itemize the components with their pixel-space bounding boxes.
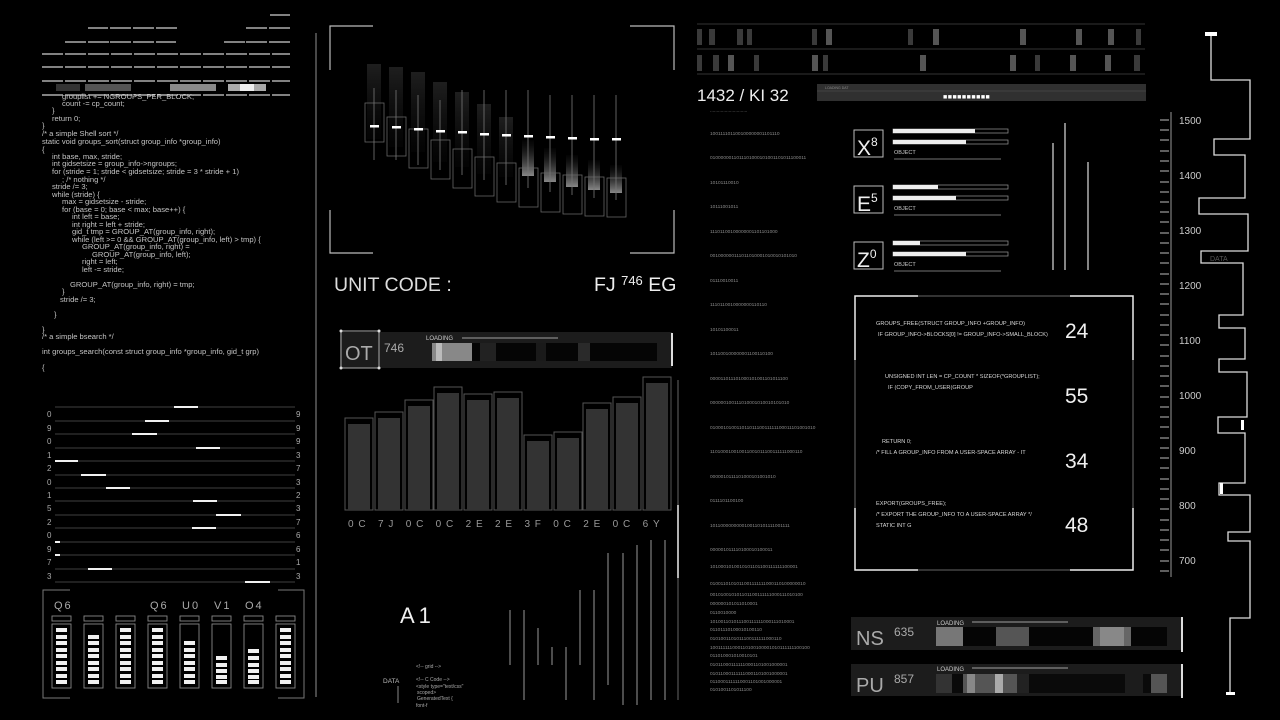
chart: number track lines: 7 (296, 464, 301, 473)
chart: ruler scale: 800 (1179, 501, 1196, 512)
panel: XEZ indicators: OBJECT (894, 206, 916, 212)
text block: C source code: stride /= 3; (52, 182, 88, 191)
text block: binary column: 01000101001101101110011111100011101001010 (710, 425, 816, 431)
chart: number track lines: 3 (296, 504, 301, 513)
chart: number track lines: 3 (47, 572, 52, 581)
chart: number track lines: 6 (296, 531, 301, 540)
chart: number track lines: 9 (296, 437, 301, 446)
chart: number track lines (47, 407, 301, 582)
text block: binary column: 0111101100100 (710, 498, 744, 504)
text block: C source code: stride /= 3; (60, 295, 96, 304)
text block: C source code: int base, max, stride; (52, 152, 122, 161)
divider line center (677, 380, 679, 700)
panel: code values: RETURN 0; (882, 439, 912, 445)
panel: XEZ indicators: Z (857, 249, 870, 272)
panel: OT loading bar (340, 330, 673, 370)
chart: number track lines: 9 (296, 424, 301, 433)
panel: code values: /* FILL A GROUP_INFO FROM A USER-SPACE ARRAY - IT (876, 450, 1026, 456)
panel: code values: IF GROUP_INFO->BLOCKS[0] != GROUP_INFO->SMALL_BLOCK) (878, 332, 1048, 338)
text block: C source code: /* a simple Shell sort */ (42, 129, 119, 138)
text block: C source code: while (stride) { (51, 190, 100, 199)
text block: binary column: 0110010000 (710, 610, 737, 616)
text block: binary column: 0110001111110001101001000001 (710, 679, 783, 685)
panel: code values (855, 296, 1133, 570)
panel: NS loading (851, 617, 1183, 652)
text block: C source code: count -= cp_count; (62, 99, 125, 108)
text block: C source code: int gidsetsize = group_info->ngroups; (52, 159, 177, 168)
text block: binary column: 1011000000000100110101111001111 (710, 523, 790, 529)
text: FJ 746 EG: EG (643, 274, 676, 296)
chart: ruler scale: 1200 (1179, 281, 1202, 292)
chart: ruler scale (1160, 112, 1202, 577)
text block: binary column: 010110001111110001101001000001 (710, 662, 788, 668)
text block: binary column: 000011011101000101001101011100 (710, 376, 788, 382)
panel: OT loading bar: 746 (384, 341, 404, 355)
loading data strip (817, 84, 1146, 101)
panel: level meters: Q6 (54, 600, 73, 612)
text block: C source code: GROUP_AT(group_info, left); (92, 250, 191, 259)
panel: code values: 48 (1065, 514, 1088, 537)
text block: C source code: int left = base; (72, 212, 120, 221)
text block: C source code: right = left; (82, 257, 118, 266)
panel: OT loading bar: OT (345, 343, 373, 365)
text block: C source code: /* a simple bsearch */ (42, 332, 115, 341)
panel: XEZ indicators: OBJECT (894, 262, 916, 268)
chart: ruler scale: 1300 (1179, 226, 1202, 237)
text block: binary column: 101100100000001100110100 (710, 351, 773, 357)
panel: PU loading: PU (856, 675, 884, 697)
chart: ruler scale: 700 (1179, 556, 1196, 567)
panel: NS loading: NS (856, 628, 884, 650)
panel: code values: UNSIGNED INT LEN = CP_COUNT * SIZEOF(*GROUPLIST); (885, 374, 1040, 380)
text block: C source code: return 0; (52, 114, 80, 123)
panel: XEZ indicators: X (857, 137, 871, 160)
chart: number track lines: 0 (47, 437, 52, 446)
panel: level meters: O4 (245, 600, 264, 612)
text block: binary column: 10111001011 (710, 204, 739, 210)
chart: number track lines: 9 (47, 424, 52, 433)
chart: ruler scale: 1400 (1179, 171, 1202, 182)
panel: code values: 34 (1065, 450, 1089, 473)
panel: level meters: V1 (214, 600, 231, 612)
chart: number track lines: 3 (296, 451, 301, 460)
panel: code values: STATIC INT G (876, 523, 911, 529)
text: DATA snippet: scoped> (417, 690, 436, 696)
text block: C source code: GROUP_AT(group_info, right) = tmp; (70, 280, 195, 289)
text block: C source code: { (42, 145, 45, 154)
panel: XEZ indicators: E (857, 193, 871, 216)
text block: C source code: while (left >= 0 && GROUP_AT(group_info, left) > tmp) { (71, 235, 261, 244)
text block: binary column: 0000010111101000101001010 (710, 474, 776, 480)
chart: number track lines: 9 (47, 545, 52, 554)
text block: C source code: gid_t tmp = GROUP_AT(group_info, right); (72, 227, 215, 236)
heading: unit code: UNIT CODE : (334, 274, 452, 296)
panel: top-left dash grid (42, 15, 290, 95)
text: DATA snippet: GeneratedText { (417, 696, 453, 702)
panel: code values: /* EXPORT THE GROUP_INFO TO A USER-SPACE ARRAY */ (876, 512, 1032, 518)
text block: binary column: 01101110100010100110 (710, 627, 762, 633)
text block: binary column: 10101100011 (710, 327, 739, 333)
text: DATA snippet: <!-- C Code --> (416, 677, 450, 683)
panel: level meters: Q6 (150, 600, 169, 612)
text: DATA snippet (383, 664, 464, 709)
text block: C source code: GROUP_AT(group_info, right) = (82, 242, 190, 251)
chart: number track lines: 0 (47, 410, 52, 419)
panel: code values: IF (COPY_FROM_USER(GROUP (888, 385, 973, 391)
panel: code values: EXPORT(GROUPS_FREE); (876, 501, 947, 507)
panel: level meters (43, 590, 304, 698)
text block: binary column: 001010010101101100111111000111010100 (710, 592, 803, 598)
panel: XEZ indicators: OBJECT (894, 150, 916, 156)
chart: number track lines: 7 (296, 518, 301, 527)
panel: code values: 24 (1065, 320, 1089, 343)
text block: binary column: 011010001010010101 (710, 653, 758, 659)
text block: C source code: for (stride = 1; stride < gidsetsize; stride = 3 * stride + 1) (52, 167, 239, 176)
chart: step line: DATA (1210, 256, 1228, 263)
chart: number track lines: 7 (47, 558, 52, 567)
text: DATA snippet: <style type="text/css" (416, 684, 464, 690)
loading data strip: LOADING DAT (825, 86, 849, 90)
text block: C source code: grouplist += NGROUPS_PER_BLOCK; (62, 92, 194, 101)
text: DATA snippet: DATA (383, 678, 400, 685)
text block: C source code: } (62, 287, 65, 296)
panel: PU loading: 857 (894, 672, 914, 686)
chart: number track lines: 2 (47, 464, 52, 473)
panel: XEZ indicators (854, 123, 1088, 272)
panel: PU loading (851, 664, 1183, 698)
text block: binary column: 100111111000110100100001010111111100100 (710, 645, 810, 651)
text block: binary column: 0100000011011101000101001101011100011 (710, 155, 807, 161)
text block: binary column: ............................ (710, 109, 747, 114)
chart: code bar chart: 0C 7J 0C 0C 2E 2E 3F 0C 2E 0C 6Y (348, 519, 664, 530)
panel: NS loading: 635 (894, 625, 914, 639)
chart: code bar chart (345, 377, 671, 530)
text block: C source code: max = gidsetsize - stride; (62, 197, 146, 206)
chart: step line (1199, 32, 1250, 695)
panel: OT loading bar: LOADING (426, 336, 453, 342)
chart: number track lines: 5 (47, 504, 52, 513)
chart: ruler scale: 900 (1179, 446, 1196, 457)
chart: number track lines: 0 (47, 478, 52, 487)
text: DATA snippet: font-f (416, 703, 428, 709)
text block: binary column: 100111101100100000001101110 (710, 131, 780, 137)
frame line left (315, 33, 317, 697)
panel: XEZ indicators: 5 (871, 191, 878, 205)
panel: XEZ indicators: 0 (870, 247, 877, 261)
text: DATA snippet: <!-- grid --> (416, 664, 441, 670)
chart: number track lines: 6 (296, 545, 301, 554)
text block: C source code: for (base = 0; base < max; base++) { (62, 205, 186, 214)
text block: binary column: 010110001111110001101001000001 (710, 671, 788, 677)
text block: binary column: 0101001101011100111111000110 (710, 636, 782, 642)
chart: number track lines: 3 (296, 478, 301, 487)
text block: binary column: 101001101011100111111000111010001 (710, 619, 795, 625)
text block: C source code: int right = left + stride; (72, 220, 145, 229)
text block: binary column: 11101100100000001101101000 (710, 229, 778, 235)
heading: 1432 / KI 32: 1432 / KI 32 (697, 86, 789, 105)
text: FJ 746 EG: FJ (594, 274, 616, 296)
text block: C source code: } (42, 325, 45, 334)
text block: binary column: 10101110010 (710, 180, 739, 186)
heading: A1: A1 (400, 603, 435, 628)
text block: binary column: 1010001010010101101100111111100001 (710, 564, 798, 570)
text block: C source code: ; /* nothing */ (62, 175, 106, 184)
text block: C source code: } (54, 310, 57, 319)
text block: C source code: int groups_search(const struct group_info *group_info, gid_t grp) (42, 347, 259, 356)
panel: PU loading: LOADING (937, 667, 964, 673)
loading data strip: ■■■■■■■■■■ (943, 94, 990, 101)
text block: binary column: 110100010010011001011100111111000110 (710, 449, 803, 455)
chart: number track lines: 9 (296, 410, 301, 419)
panel: top barcode strips (697, 24, 1145, 74)
text block: binary column: 01110010011 (710, 278, 739, 284)
chart: number track lines: 1 (47, 451, 52, 460)
chart: number track lines: 3 (296, 572, 301, 581)
text block: binary column (710, 109, 816, 693)
text block: binary column: 000000100111010001010010101010 (710, 400, 790, 406)
text block: C source code: } (52, 106, 55, 115)
text block: C source code: } (42, 121, 45, 130)
panel: level meters: U0 (182, 600, 200, 612)
panel: code values: GROUPS_FREE(STRUCT GROUP_INFO +GROUP_INFO) (876, 321, 1025, 327)
panel: NS loading: LOADING (937, 621, 964, 627)
text block: binary column: 0101001101011100 (710, 687, 752, 693)
text block: binary column: 0100110101011001111111000110100000010 (710, 581, 806, 587)
text block: C source code: left -= stride; (82, 265, 124, 274)
text block: binary column: 1110110010000000110110 (710, 302, 767, 308)
chart: ruler scale: 1500 (1179, 116, 1202, 127)
chart: number track lines: 2 (47, 518, 52, 527)
chart: number track lines: 0 (47, 531, 52, 540)
chart: number track lines: 1 (296, 558, 301, 567)
panel: code values: 55 (1065, 385, 1088, 408)
text block: C source code: static void groups_sort(struct group_info *group_info) (42, 137, 221, 146)
text block: binary column: 000000101011010001 (710, 601, 758, 607)
chart: waterfall columns (365, 64, 626, 217)
text block: C source code: { (42, 363, 45, 372)
chart: ruler scale: 1100 (1179, 336, 1201, 347)
text: FJ 746 EG: 746 (621, 273, 643, 288)
chart: number track lines: 2 (296, 491, 301, 500)
panel: XEZ indicators: 8 (871, 135, 878, 149)
chart: vertical signal lines (510, 540, 665, 705)
chart: number track lines: 1 (47, 491, 52, 500)
text block: binary column: 000001011110100010100011 (710, 547, 773, 553)
text block: binary column: 001000000111011010001010010101010 (710, 253, 797, 259)
text block: C source code (42, 92, 261, 372)
panel: waterfall display frame (330, 26, 674, 253)
chart: ruler scale: 1000 (1179, 391, 1202, 402)
